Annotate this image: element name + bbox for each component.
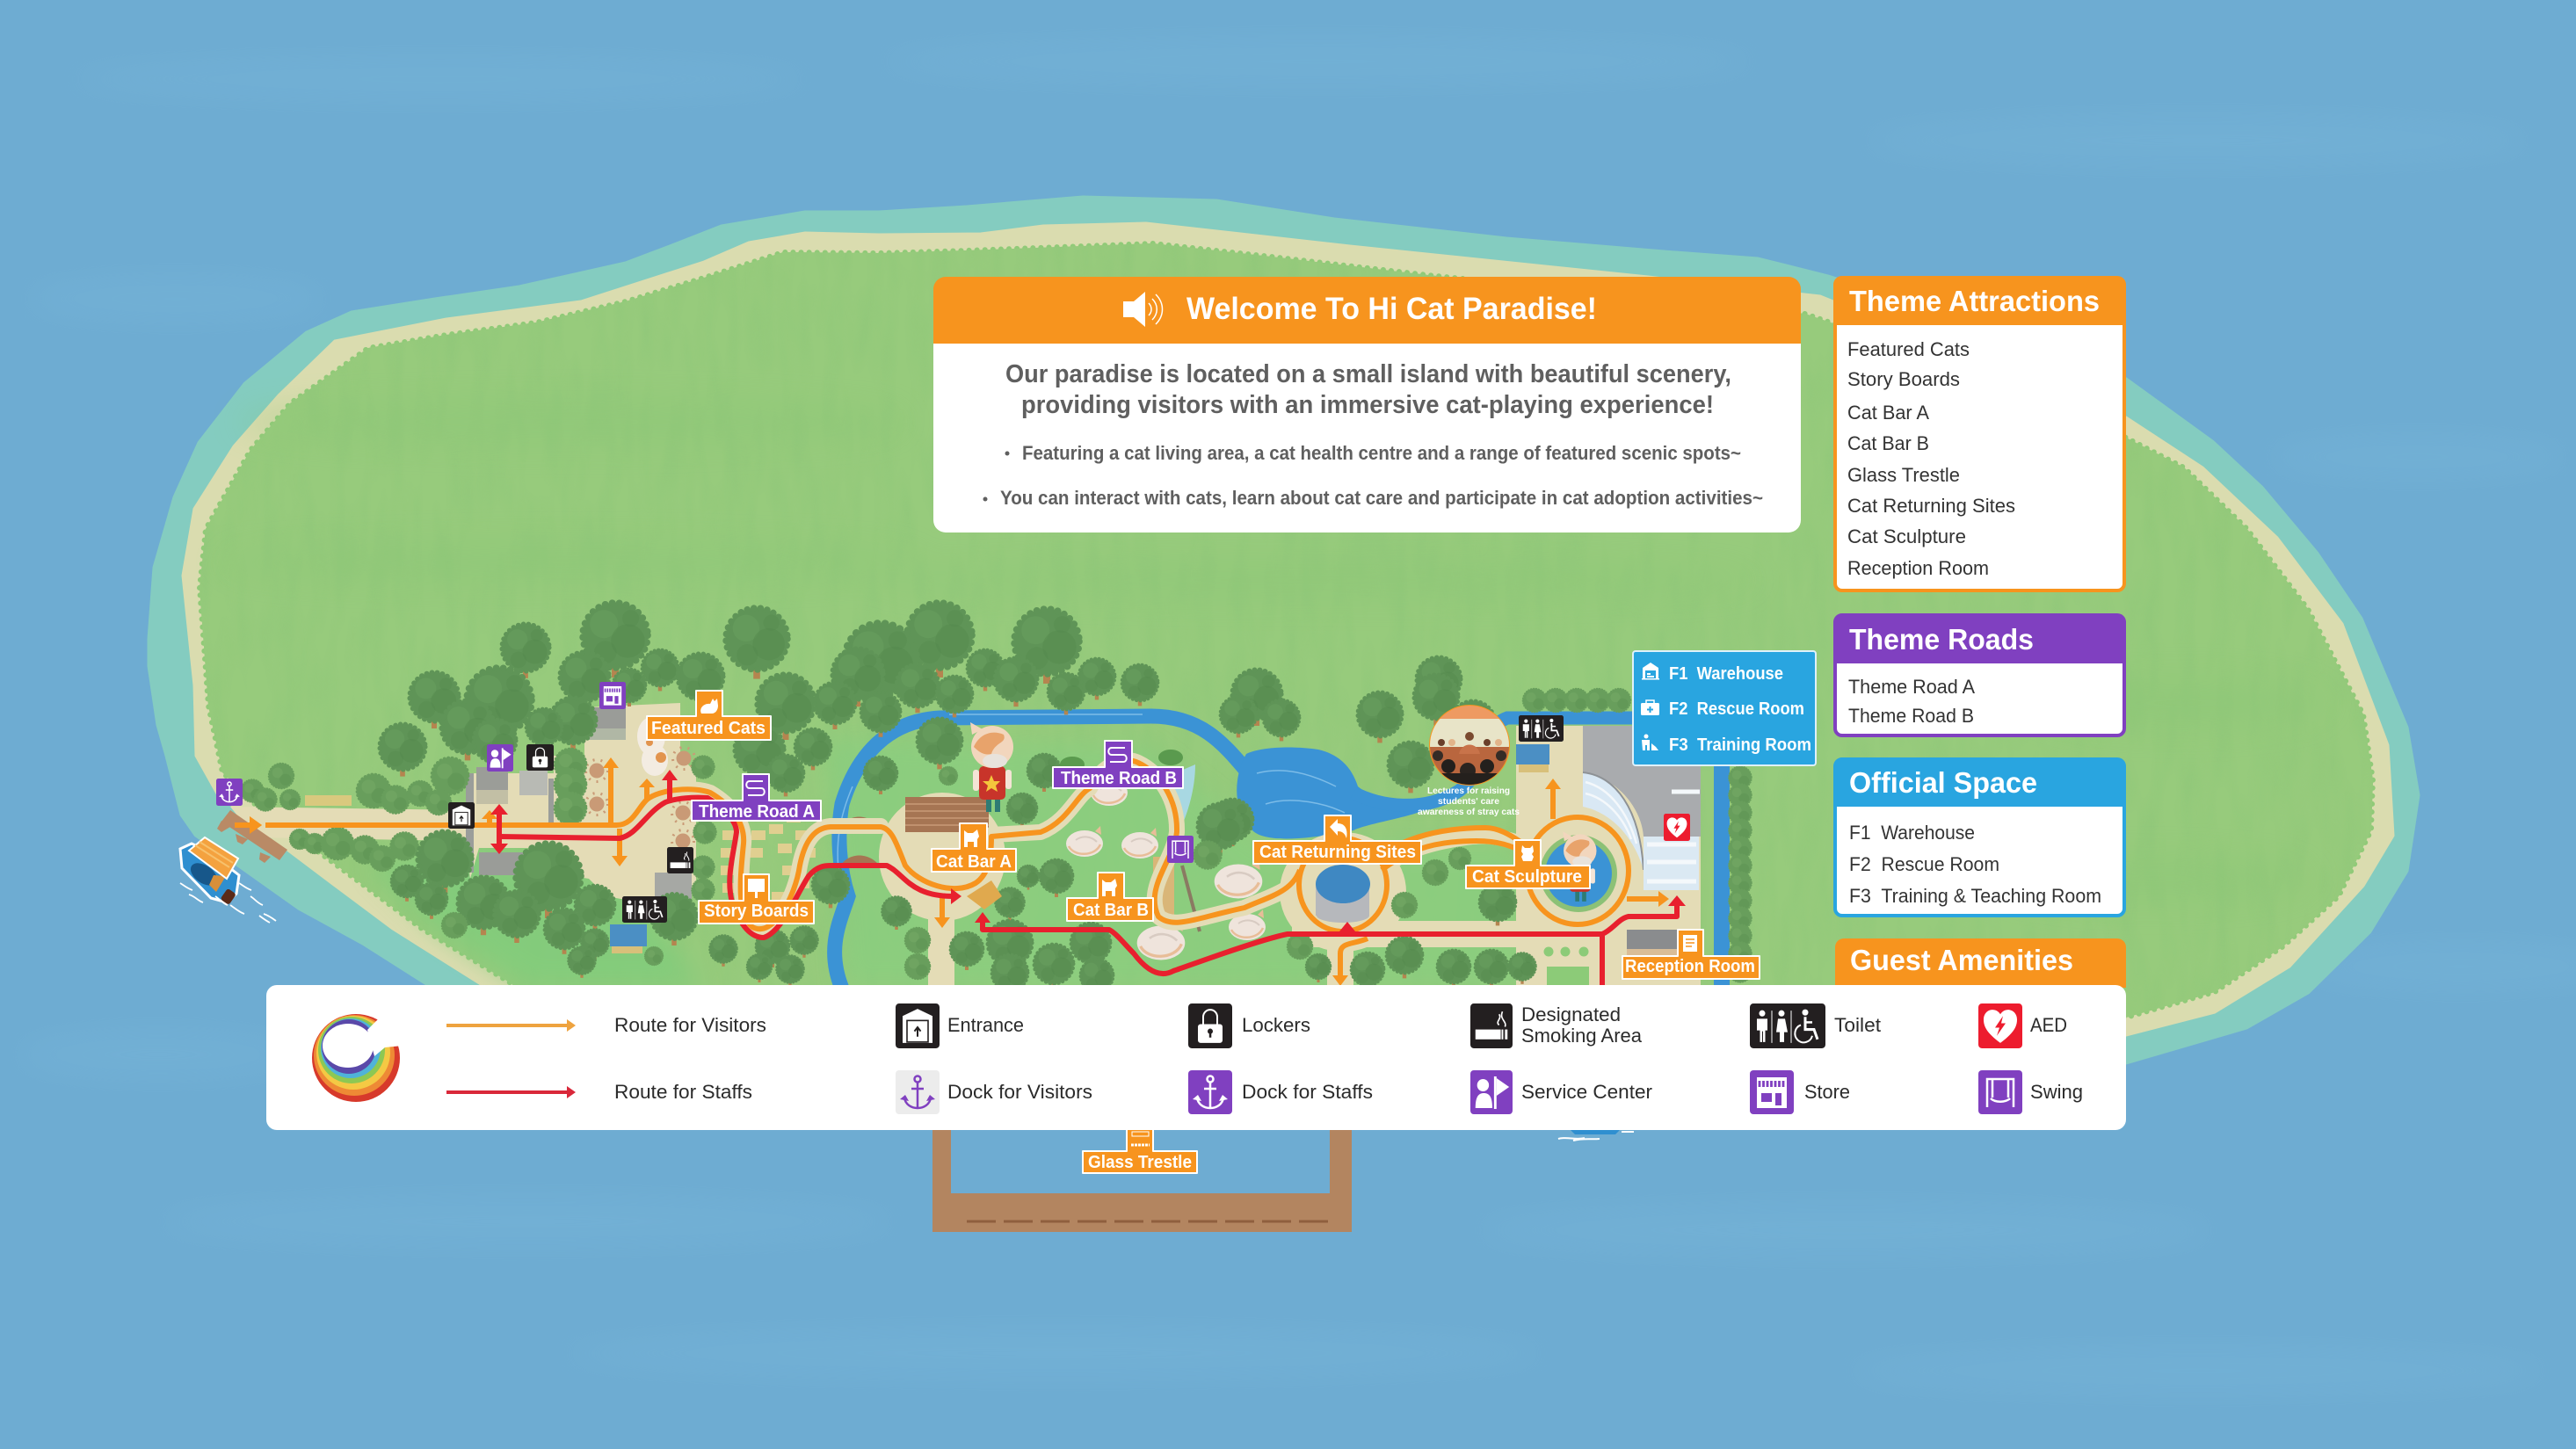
map icon: service center	[487, 744, 513, 772]
label: Theme Road A	[692, 774, 821, 822]
panel: guest amenities	[1835, 938, 2126, 988]
welcome intro: providing visitors with an immersive cat-playing experience!	[1021, 391, 1714, 419]
map icon: dock for staffs	[216, 779, 243, 806]
icon: boat	[180, 837, 276, 923]
legend: swing: Swing	[2030, 1081, 2083, 1103]
label: Story Boards	[699, 874, 814, 924]
legend: route for staffs: Route for Staffs	[614, 1081, 752, 1103]
panel: theme roads: Theme Road B	[1848, 705, 1974, 727]
map icon: swing	[1167, 836, 1194, 863]
panel: theme attractions: Cat Sculpture	[1847, 525, 1966, 547]
legend: lockers	[1188, 1003, 1310, 1048]
legend: dock for staffs: Dock for Staffs	[1242, 1081, 1373, 1103]
legend: store: Store	[1804, 1081, 1850, 1103]
legend: designated smoking area: Designated	[1521, 1003, 1621, 1025]
legend: service center: Service Center	[1521, 1081, 1652, 1103]
legend: store	[1750, 1070, 1850, 1114]
panel: theme attractions: Glass Trestle	[1847, 464, 1960, 486]
glass slide near road B	[1153, 764, 1200, 931]
trees	[242, 603, 1751, 996]
label: Cat Sculpture: Cat Sculpture	[1472, 867, 1582, 887]
legend: AED	[1978, 1003, 2067, 1048]
label: Reception Room: Reception Room	[1625, 957, 1755, 976]
legend: route for visitors	[446, 1014, 766, 1036]
legend: dock for visitors	[896, 1070, 1092, 1114]
welcome title: Welcome To Hi Cat Paradise!	[1186, 292, 1597, 326]
map icon: toilet east	[1519, 715, 1564, 742]
visitor route arrowheads	[250, 757, 1669, 986]
callout: official space floors: F1 Warehouse	[1669, 664, 1783, 684]
island	[149, 198, 2418, 1090]
panel: theme roads: Theme Roads	[1849, 623, 2034, 656]
beach	[183, 223, 2393, 1054]
dock	[217, 810, 287, 863]
panel: theme roads: Theme Road A	[1848, 676, 1975, 698]
legend: designated smoking area: Smoking Area	[1521, 1025, 1643, 1047]
route for staffs	[499, 777, 1677, 986]
panel: legend	[266, 985, 2126, 1130]
label: Featured Cats: Featured Cats	[651, 719, 766, 738]
cat sculpture character	[1563, 831, 1596, 902]
panel: official space: F1 Warehouse	[1849, 822, 1975, 844]
lecture photo circle	[1429, 705, 1510, 786]
story board stalls	[721, 813, 816, 902]
welcome bullets: Featuring a cat living area, a cat health centre and a range of featured scenic spots~	[1022, 442, 1741, 464]
panel: guest amenities: Guest Amenities	[1850, 944, 2073, 976]
label: Featured Cats	[647, 691, 771, 740]
bench and bridges	[839, 797, 1002, 909]
callout: official space floors: F3 Training Room	[1669, 735, 1811, 755]
panel: theme attractions: Story Boards	[1847, 368, 1960, 390]
fountain plaza	[1316, 865, 1370, 923]
buildings	[305, 707, 692, 953]
lecture caption	[1418, 786, 1520, 817]
callout: official space floors	[1633, 651, 1816, 765]
label: Theme Road A: Theme Road A	[699, 802, 815, 822]
legend: toilet: Toilet	[1834, 1014, 1881, 1036]
panel: welcome	[933, 277, 1801, 533]
panel: theme attractions: Theme Attractions	[1849, 285, 2100, 317]
lecture caption: awareness of stray cats	[1418, 808, 1520, 817]
panel: theme roads	[1833, 613, 2126, 735]
welcome intro	[1005, 360, 1731, 419]
panel: theme attractions: Cat Bar A	[1847, 402, 1929, 424]
big cat character	[970, 722, 1013, 812]
icon: rainbow logo	[312, 1014, 403, 1102]
panel: official space: F2 Rescue Room	[1849, 853, 1999, 875]
icon: warehouse	[1642, 663, 1659, 680]
ground paving and plazas	[230, 703, 1701, 989]
map icon: AED	[1664, 814, 1690, 841]
welcome intro: Our paradise is located on a small island with beautiful scenery,	[1005, 360, 1731, 388]
label: Theme Road B: Theme Road B	[1061, 769, 1177, 788]
dock arrow	[235, 816, 262, 834]
map icon: entrance	[448, 802, 475, 829]
icon: trainer with cat	[1642, 735, 1658, 750]
label: Cat Returning Sites: Cat Returning Sites	[1259, 843, 1416, 862]
legend: AED: AED	[2030, 1014, 2067, 1036]
legend: swing	[1978, 1070, 2083, 1114]
icon: distant boat	[1558, 1128, 1634, 1141]
legend: dock for staffs	[1188, 1070, 1373, 1114]
icon: medical kit	[1641, 700, 1659, 715]
legend: entrance	[896, 1003, 1024, 1048]
reception building and glass roof	[1516, 726, 1701, 985]
panel: theme attractions: Reception Room	[1847, 557, 1989, 579]
lecture caption: students' care	[1438, 797, 1499, 807]
route for visitors	[235, 760, 1661, 980]
label: Story Boards: Story Boards	[704, 902, 809, 921]
panel: theme attractions: Cat Returning Sites	[1847, 495, 2015, 517]
callout: official space floors: F2 Rescue Room	[1669, 699, 1804, 719]
panel: official space	[1833, 757, 2126, 916]
cat sculpture pond	[1540, 835, 1617, 912]
label: Cat Returning Sites	[1253, 815, 1421, 864]
legend: entrance: Entrance	[947, 1014, 1024, 1036]
legend: service center	[1470, 1070, 1652, 1114]
sleeping cats	[1060, 750, 1266, 960]
legend: lockers: Lockers	[1242, 1014, 1310, 1036]
staff route arrowheads	[490, 770, 1686, 931]
map icon: toilet west	[622, 896, 667, 923]
lecture caption: Lectures for raising	[1427, 786, 1510, 796]
label: Cat Bar B	[1067, 873, 1153, 921]
label: Cat Sculpture	[1466, 840, 1590, 888]
panel: theme attractions	[1833, 276, 2126, 590]
label: Cat Bar A: Cat Bar A	[936, 852, 1012, 872]
walkway underlay	[647, 760, 1520, 930]
map icon: store	[599, 682, 626, 709]
glass trestle bridge	[932, 1116, 1352, 1232]
label: Glass Trestle: Glass Trestle	[1088, 1153, 1192, 1172]
welcome bullets	[983, 442, 1763, 509]
legend: route for visitors: Route for Visitors	[614, 1014, 766, 1036]
panel: official space: Official Space	[1849, 766, 2037, 799]
legend: dock for visitors: Dock for Visitors	[947, 1081, 1092, 1103]
legend: designated smoking area	[1470, 1003, 1643, 1048]
panel: theme attractions: Cat Bar B	[1847, 432, 1929, 454]
legend: toilet	[1750, 1003, 1881, 1048]
rivers and lake	[835, 714, 1730, 989]
label: Reception Room	[1622, 930, 1760, 979]
map icon: lockers	[526, 744, 554, 771]
label: Theme Road B	[1053, 741, 1183, 788]
label: Cat Bar B: Cat Bar B	[1073, 901, 1149, 920]
dining tables and seats	[585, 717, 694, 852]
panel: theme attractions: Featured Cats	[1847, 338, 1970, 360]
grass	[200, 243, 2373, 1046]
welcome bullets: You can interact with cats, learn about cat care and participate in cat adoption activities~	[1000, 487, 1763, 509]
label: Cat Bar A	[932, 823, 1016, 872]
label: Glass Trestle	[1083, 1125, 1197, 1173]
panel: official space: F3 Training & Teaching Room	[1849, 885, 2101, 907]
map icon: smoking area	[667, 847, 693, 873]
icon: speaker	[1123, 292, 1162, 327]
legend: route for staffs	[446, 1081, 752, 1103]
shallow water ring	[149, 198, 2418, 1090]
